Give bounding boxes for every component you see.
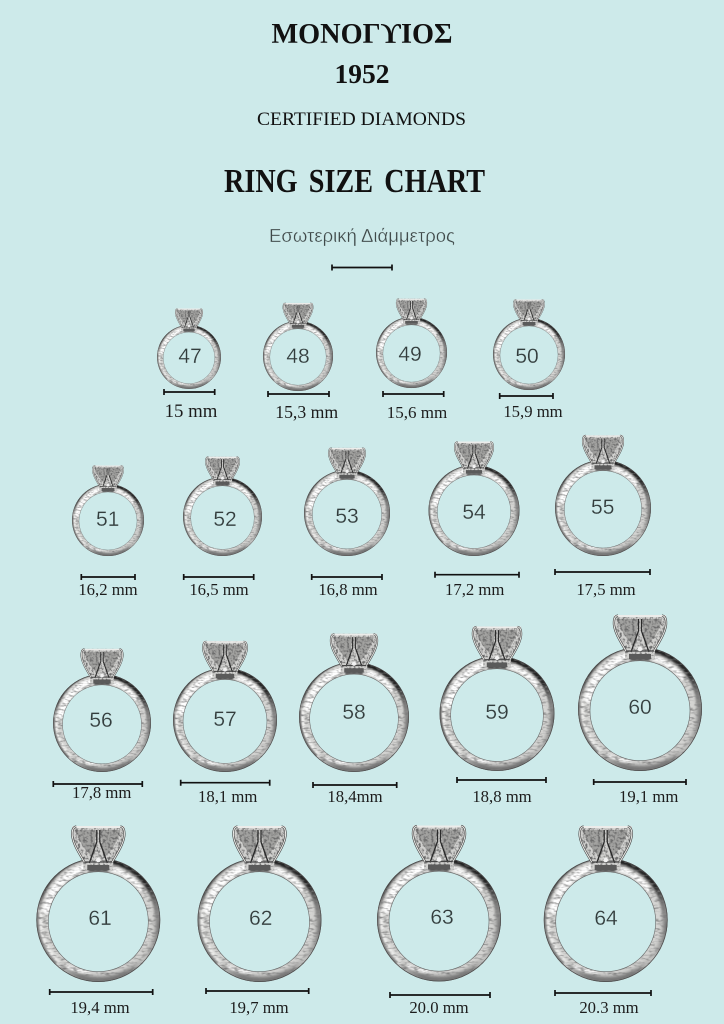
size number 54: 54 <box>462 501 486 524</box>
ring 64 <box>542 825 670 1017</box>
measure bar 59 <box>457 777 546 783</box>
measure bar 54 <box>435 572 519 578</box>
size number 53: 53 <box>335 505 359 528</box>
ring 49 <box>375 298 448 422</box>
ring illustration 49 <box>375 298 448 389</box>
ring 62 <box>196 825 324 1017</box>
ring 61 <box>34 825 162 1017</box>
ring illustration 57 <box>171 640 279 774</box>
diameter 51: 16,2 mm <box>78 580 138 599</box>
legend measure bar <box>332 264 392 270</box>
size number 56: 56 <box>89 709 113 732</box>
ring illustration 50 <box>492 299 566 391</box>
subtitle: inner diameter: Εσωτερική Διάμμετρος <box>269 226 455 246</box>
ring illustration 47 <box>156 308 222 390</box>
ring illustration 58 <box>297 633 411 774</box>
ring illustration 55 <box>553 434 653 558</box>
size number 52: 52 <box>213 508 237 531</box>
ring illustration 52 <box>182 456 263 557</box>
ring 51 <box>71 465 145 599</box>
size number 64: 64 <box>594 907 618 930</box>
ring 59 <box>438 625 556 806</box>
ring illustration 62 <box>196 825 324 984</box>
ring 53 <box>303 447 391 599</box>
diameter 48: 15,3 mm <box>275 402 338 422</box>
diameter 54: 17,2 mm <box>445 580 504 599</box>
measure bar 60 <box>594 779 686 785</box>
diameter 64: 20.3 mm <box>579 998 639 1017</box>
diameter 53: 16,8 mm <box>318 580 378 599</box>
measure bar 51 <box>81 574 135 580</box>
brand title: ΜΟΝΟΓϒΙΟΣ <box>272 18 452 50</box>
diameter 62: 19,7 mm <box>229 998 289 1017</box>
diameter 52: 16,5 mm <box>189 580 249 599</box>
ring 55 <box>553 434 653 599</box>
measure bar 56 <box>53 781 142 787</box>
measure bar 64 <box>555 990 651 996</box>
measure bar 52 <box>184 574 254 580</box>
diameter 63: 20.0 mm <box>409 998 469 1017</box>
size number 57: 57 <box>213 708 237 731</box>
diameter 60: 19,1 mm <box>619 787 678 806</box>
size number 55: 55 <box>591 496 614 519</box>
size number 59: 59 <box>485 701 509 724</box>
size number 58: 58 <box>342 701 366 724</box>
measure bar 47 <box>164 389 215 395</box>
ring illustration 60 <box>576 614 704 773</box>
ring illustration 54 <box>427 441 521 557</box>
ring illustration 53 <box>303 447 391 557</box>
ring illustration 48 <box>262 302 334 392</box>
measure bar 58 <box>313 782 397 788</box>
diameter 58: 18,4mm <box>327 787 383 806</box>
ring illustration 51 <box>71 465 145 557</box>
measure bar 57 <box>181 780 270 786</box>
ring illustration 56 <box>51 648 153 774</box>
diameter 49: 15,6 mm <box>387 403 447 422</box>
measure bar 48 <box>268 391 329 397</box>
diameter 59: 18,8 mm <box>472 787 532 806</box>
size number 50: 50 <box>515 345 539 368</box>
diameter 57: 18,1 mm <box>198 787 257 806</box>
ring 50 <box>492 299 566 421</box>
diameter 61: 19,4 mm <box>70 998 130 1017</box>
size number 51: 51 <box>96 508 119 531</box>
heading: ring size chart: RING SIZE CHART <box>224 163 485 200</box>
measure bar 61 <box>50 989 153 995</box>
ring 48 <box>262 302 338 422</box>
ring illustration 64 <box>542 825 670 984</box>
ring illustration 63 <box>375 824 503 984</box>
measure bar 53 <box>312 574 382 580</box>
ring 60 <box>576 614 704 806</box>
diameter 50: 15,9 mm <box>503 402 563 421</box>
ring 58 <box>297 633 411 806</box>
measure bar 55 <box>555 569 650 575</box>
size number 63: 63 <box>430 906 454 929</box>
size number 49: 49 <box>398 343 422 366</box>
year: 1952 <box>334 58 390 89</box>
size number 61: 61 <box>88 907 112 930</box>
measure bar 63 <box>390 992 490 998</box>
size number 62: 62 <box>249 907 272 930</box>
ring 47 <box>156 308 222 422</box>
size number 48: 48 <box>286 345 310 368</box>
tagline: CERTIFIED DIAMONDS <box>257 109 466 130</box>
size number 60: 60 <box>628 696 652 719</box>
diameter 55: 17,5 mm <box>576 580 636 599</box>
diameter 56: 17,8 mm <box>72 783 131 802</box>
ring 52 <box>182 456 263 599</box>
ring illustration 61 <box>34 825 162 984</box>
measure bar 62 <box>206 988 309 994</box>
size number 47: 47 <box>178 345 202 368</box>
ring 56 <box>51 648 153 802</box>
diameter 47: 15 mm <box>165 401 218 422</box>
ring 57 <box>171 640 279 806</box>
measure bar 49 <box>383 391 444 397</box>
ring 63 <box>375 824 503 1017</box>
ring illustration 59 <box>438 625 556 773</box>
ring 54 <box>427 441 521 599</box>
measure bar 50 <box>500 393 553 399</box>
